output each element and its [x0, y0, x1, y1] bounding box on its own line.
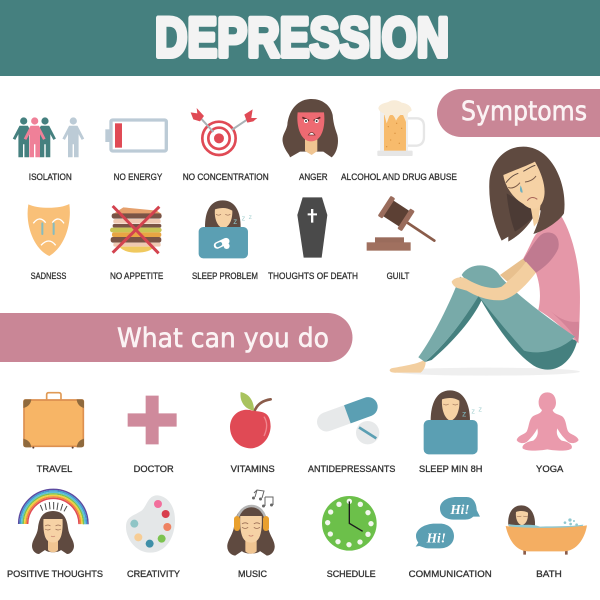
label: schedule: SCHEDULE [327, 569, 376, 579]
label: sleep min 8h: SLEEP MIN 8H [419, 464, 482, 474]
title: DEPRESSION [155, 6, 449, 68]
panel: what can you do heading: What can you do [117, 323, 329, 354]
label: thoughts of death: THOUGHTS OF DEATH [268, 271, 358, 281]
label: no appetite: NO APPETITE [110, 271, 163, 281]
icon: sleep minimum 8 hours [424, 390, 482, 454]
icon: beer mug [377, 100, 424, 156]
label: sadness: SADNESS [31, 271, 66, 281]
label: music: MUSIC [238, 569, 268, 579]
label: guilt: GUILT [387, 271, 410, 281]
header band [0, 0, 600, 76]
icon: anger face [283, 99, 338, 157]
label: vitamins: VITAMINS [231, 464, 275, 474]
icon: sleep minimum 8 hours: z [471, 406, 475, 415]
icon: communication speech bubbles: Hi! [426, 530, 446, 545]
icon: doctor cross [128, 396, 177, 444]
label: no energy: NO ENERGY [114, 172, 162, 182]
label: communication: COMMUNICATION [409, 569, 492, 579]
label: no concentration: NO CONCENTRATION [183, 172, 269, 182]
icon: communication speech bubbles [416, 497, 480, 548]
label: travel: TRAVEL [37, 464, 72, 474]
icon: creativity palette [126, 495, 175, 553]
panel: what can you do heading [0, 313, 352, 362]
icon: bath [506, 505, 587, 555]
icon: thoughts of death coffin [297, 197, 327, 258]
icon: positive thoughts rainbow [19, 489, 88, 559]
icon: sleep problem: z [242, 214, 246, 223]
label: creativity: CREATIVITY [127, 569, 180, 579]
panel: symptoms heading [437, 89, 600, 137]
label: yoga: YOGA [536, 464, 563, 474]
illustration: sad woman sitting [390, 147, 580, 376]
label: doctor: DOCTOR [134, 464, 174, 474]
icon: isolation [13, 117, 84, 157]
icon: communication speech bubbles: Hi! [449, 502, 470, 517]
icon: sadness mask [28, 204, 70, 256]
label: alcohol and drug abuse: ALCOHOL AND DRUG ABUSE [341, 172, 457, 182]
label: positive thoughts: POSITIVE THOUGHTS [7, 569, 103, 579]
icon: sleep problem [199, 200, 252, 258]
icon: travel suitcase [23, 393, 84, 449]
icon: music headphones [227, 490, 275, 556]
icon: guilt gavel [367, 196, 434, 251]
label: isolation: ISOLATION [29, 172, 72, 182]
icon: vitamins apple [230, 392, 271, 448]
icon: positive thoughts face [32, 511, 74, 554]
icon: antidepressants capsule [314, 394, 380, 444]
icon: sleep problem: z [249, 214, 252, 221]
label: anger: ANGER [299, 172, 328, 182]
icon: schedule clock [322, 496, 377, 551]
icon: sleep minimum 8 hours: z [478, 404, 482, 413]
icon: yoga silhouette [517, 392, 579, 451]
icon: sleep problem: z [233, 217, 237, 226]
icon: sleep minimum 8 hours: z [462, 409, 466, 419]
label: antidepressants: ANTIDEPRESSANTS [308, 464, 395, 474]
icon: no concentration target [191, 108, 257, 155]
icon: no appetite burger [110, 206, 162, 253]
label: sleep problem: SLEEP PROBLEM [192, 271, 258, 281]
label: bath: BATH [536, 569, 562, 579]
icon: no energy battery [105, 120, 166, 151]
